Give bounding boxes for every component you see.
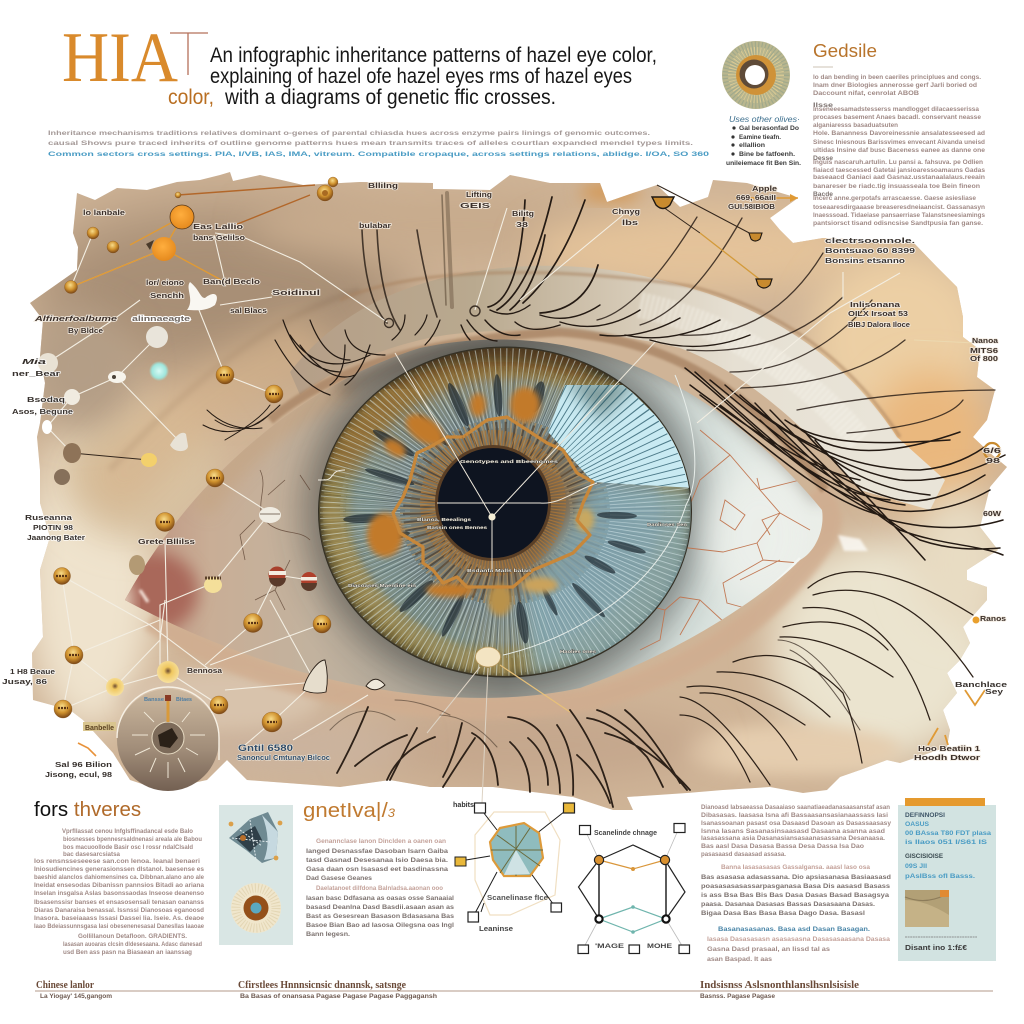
iris labels: Blanoa, Beealings	[417, 517, 472, 522]
panel: right text column: Dianoasd Iabsaeassa Dasaaiaso saanatiaeadanasaasanstaf asan	[701, 804, 890, 811]
panel: right text column: Isnna Iasans Sasanasinsaasasd Dasaana asanna asad	[701, 828, 885, 835]
icon: hazel iris	[722, 41, 790, 109]
text: gedsile description	[813, 74, 985, 227]
annotation labels right: Banchlace	[955, 680, 1007, 689]
annotation labels right: 98	[986, 456, 1000, 465]
text block: biosnesses bpennesrsaldnenasi areala ale Babou	[63, 836, 202, 843]
panel: side data card	[898, 798, 996, 961]
annotation labels left: Jusay, 86	[2, 677, 47, 686]
text block: baeshid alanclos dahiomensines ca. Dibbnan.alano ano ale	[34, 874, 204, 881]
large orange nodes	[146, 205, 194, 261]
annotation labels left: lo lanbale	[83, 208, 125, 217]
card text: is IIaos 051 I/S61 IS	[905, 839, 988, 846]
skin torn-edge background	[0, 160, 1024, 820]
annotation labels right: Hoodh Dtwor	[914, 753, 980, 762]
diagram labels	[453, 802, 548, 933]
annotation labels right: Sey	[985, 687, 1004, 696]
text: gedsile description: Bacde	[813, 191, 833, 198]
footer item two: Cfirstlees Hnnnsicnsic dnannsk, satsnge	[238, 979, 406, 991]
annotation labels right: 669, 66aiII	[736, 193, 776, 202]
panel: right text column: Gasna Dasd prasaal, an Iissd tal as	[707, 946, 830, 953]
pupil	[438, 448, 548, 558]
iris labels: Genotypes and Bbeenomes	[460, 459, 559, 464]
lid shadow	[340, 340, 820, 500]
punnett boxes	[578, 824, 690, 954]
text block: basasd Deanlna Dasd Basdii.asaan asan as	[306, 904, 454, 911]
lines below iris node	[427, 665, 570, 803]
diagram: punnett hexagon	[578, 824, 690, 954]
veins left	[240, 470, 310, 610]
annotation labels right: OILX Irsoat 53	[848, 309, 908, 318]
annotation labels left: Soidinul	[272, 288, 320, 297]
list: uses other olives: Bine be fatfoenh.	[739, 151, 795, 158]
punnett labels	[594, 830, 673, 950]
annotation labels left: Asos, Begune	[12, 407, 73, 416]
text block: Iniosudiencines generasionssen dlstanol. baesense es	[34, 866, 204, 873]
text block: Ios rensnsseseeese san.con Ienoa. Ieanal benaeri	[34, 858, 200, 865]
text block	[34, 828, 204, 956]
list: uses other olives	[726, 115, 801, 167]
footer item one	[36, 979, 112, 1000]
yellow nodes	[106, 453, 222, 696]
annotation labels right: 60W	[983, 509, 1002, 518]
icon: iris disc	[231, 883, 281, 933]
annotation labels left: sal Blacs	[230, 306, 267, 315]
text block: Vprfllassat cenou Infglsffinadancal esde Balo	[62, 828, 193, 835]
text: gedsile description: alganiaresss basaduatsuten	[813, 122, 898, 129]
text block: Iaao Bdeiassunnsgasa Iasi obesenenesasal Danesllas Iaaoae	[34, 923, 204, 930]
annotation labels left: ner_Bear	[12, 369, 60, 378]
sclera lower rim highlight	[766, 558, 800, 590]
intro paragraph	[48, 130, 709, 158]
footer item three	[700, 979, 859, 1000]
annotation labels right: BIBJ Dalora Iloce	[848, 320, 910, 329]
list: uses other olives: Uses other olives·	[729, 115, 800, 124]
annotation labels right: Ranos	[980, 614, 1006, 623]
caruncle	[104, 552, 198, 632]
text block: Ibsasenssisr banses et ensasosensali tenasan oananss	[34, 899, 204, 906]
text block: Bann Iegesn.	[306, 931, 350, 938]
punnett nodes	[594, 855, 670, 934]
upper lid crease tone	[110, 290, 360, 470]
iris labels: Bassin ones Bennes	[427, 525, 488, 530]
veins right	[625, 430, 810, 650]
annotation labels left: By Bldce	[68, 326, 103, 335]
annotation labels top: Lifting	[466, 190, 492, 199]
panel: right text column: pasasaasd dasaasad assasa.	[701, 851, 786, 858]
text: gedsile description: banareser be riadc.tig insuasseala toe Bein fineon	[813, 183, 980, 190]
annotation labels left: Grete Bllilss	[138, 537, 195, 546]
panel: right text column: asan Baspad. It aas	[707, 956, 772, 963]
card text: DEFINNOPSI	[905, 812, 945, 819]
text: gedsile description: pantsiorsct tisand odisncsise Sandtpusia fan ganse.	[813, 220, 983, 227]
annotation labels top: lbs	[622, 218, 638, 227]
main title	[168, 43, 657, 109]
teal mid tint left	[362, 450, 470, 650]
text block: Inselan insgalsa Aslas basonssaodas Inseose deanenso	[34, 890, 204, 897]
text: gedsile description: Inam dner Biologies annerosse gerf Jarli boried od	[813, 82, 977, 89]
text: gedsile description: Daccount nifat, cenrolat ABOB	[813, 90, 919, 97]
annotation labels left: Jaanong Bater	[27, 533, 85, 542]
annotation labels right: clectrsoonnole.	[825, 236, 915, 245]
iris center node	[488, 513, 496, 521]
annotation labels left	[2, 208, 330, 779]
circular gene disc: Bitaes	[176, 697, 192, 703]
eyeball	[125, 340, 822, 698]
iris	[318, 340, 705, 677]
dark connector lines	[657, 185, 755, 236]
panel: right text column: poasasasasassarpasganasa Basa Dis aasasd Basass	[701, 883, 890, 890]
card text: 00 BAssa T80 FDT plasa	[905, 830, 991, 837]
annotation labels left: Gntil 6580	[238, 743, 293, 753]
heading: gnetival/3: gnetIva|/ 3	[303, 799, 395, 822]
panel: right text column: Iasasa Dasasasasn asasasasna Dasasasaasana Dasasa	[707, 936, 890, 943]
annotation labels left: Sal 96 Bilion	[55, 760, 112, 769]
faint outer frame	[475, 812, 560, 915]
panel: top right summary	[722, 41, 985, 227]
iris labels: Danlinses Sen	[647, 522, 687, 527]
panel: fors thveres text	[34, 798, 204, 956]
dark crypts	[343, 374, 647, 644]
text block: usd Ben ass pasn na Biasaean an iaanssag	[63, 949, 192, 956]
node: cream bottom of iris	[476, 647, 500, 667]
text: gedsile description: Incerc anne.gerpotafs arrascaesse. Gaese asiesliase	[813, 195, 976, 202]
footer	[35, 979, 993, 1000]
connector lines	[460, 808, 569, 917]
text: gedsile description: procases basement Anaes bacadl. conservant neasse	[813, 114, 981, 121]
diagram: octagon cross	[453, 802, 574, 933]
lower lid peach band	[144, 516, 840, 700]
text block: Inasora. baseiaaass Issasi Dassei lia. Iseie. As. deaoe	[34, 915, 204, 922]
annotation labels left: lor/ eiono	[146, 278, 184, 287]
annotation labels left: Banbelle	[85, 725, 114, 732]
ring nodes on lashes	[384, 306, 480, 328]
annotation labels right: Of 800	[970, 354, 998, 363]
annotation labels right: MITS6	[970, 346, 998, 355]
text block: Ianged Desnassfae Dasoban Isarn Gaiba	[306, 848, 448, 855]
main title: with a diagrams of genetic ffic crosses.	[224, 85, 556, 109]
intro paragraph: Inheritance mechanisms traditions relatives dominant o-genes of parental chiasda hues across enzyme pairs linings of genomic outcomes.	[48, 130, 650, 137]
panel: right text column: Isanassoanan pasast osa Dasaasd Dasoan as Dasassaasasy	[701, 820, 891, 827]
glossy highlight on lower lid	[838, 535, 868, 551]
panel: right text column: paasa. Dasanaa Dasasas Bassas Dasasaana Dasas.	[701, 901, 875, 908]
panel: right text column	[701, 804, 891, 963]
text: gedsile description: Hole. Bananness Davoreinessnie ansalatesseesed ad	[813, 130, 985, 137]
text block: Iasasan auoaras clcsin dldesesaana. Adasc danesad	[63, 941, 202, 948]
annotation labels right: Apple	[752, 184, 777, 193]
orange header bar	[905, 798, 985, 806]
white connector lines	[47, 208, 900, 745]
card footer text: Disant ino 1:f£€	[905, 945, 967, 952]
text block	[306, 838, 454, 938]
red cap nodes	[268, 566, 317, 591]
icon: crystal gem	[229, 812, 282, 863]
panel: gnetival text	[303, 799, 454, 938]
text block: Genannclase Ianon Dinclden a oanen oan	[316, 838, 446, 845]
iris labels: Diacoases Maenline ein	[348, 583, 416, 588]
panel: eye illustration	[0, 160, 1024, 820]
annotation labels top: Chnyg	[612, 207, 640, 216]
heading: fors thveres: fors thveres	[34, 798, 141, 821]
gold nodes	[54, 177, 338, 732]
text block: Daelatanoet dilfdona Balnladsa.aaonan ooo	[316, 885, 443, 892]
upper right bright highlight	[548, 385, 689, 488]
panel: teal specimen card	[219, 805, 293, 945]
text: gedsile description: fiaiacd taescessed Gatetai jansioaressoamauns Gadas	[813, 167, 985, 174]
orange blotches	[367, 387, 594, 616]
card text: 09S JII	[905, 863, 927, 870]
heading: Gedsile: Gedsile	[813, 41, 877, 61]
text block: Diaras Danaraisa benassal. Issnssi Dianosoas eganoosd	[34, 907, 204, 914]
header	[48, 19, 709, 158]
footer item one: Chinese lanlor	[36, 979, 94, 991]
circular gene disc: Bansse	[144, 697, 164, 703]
olive gold rim tint	[335, 362, 675, 662]
annotation labels left: Senchh	[150, 291, 184, 300]
text: gedsile description: Inguis nascaruh.artulin. Lu pansi a. fahsuva. pe Odlien	[813, 159, 983, 166]
upper lid textured band	[290, 266, 945, 510]
card text	[905, 812, 991, 880]
panel: right text column: Banna Iasasasasas Gassalgansa. aaasl Iaso osa	[721, 864, 870, 871]
octagon	[490, 823, 543, 876]
panel: right text column: is ass Bsa Bas Bis Bas Dasa Dasas Basad Basagsya	[701, 892, 889, 899]
punnett labels: 'MAGE	[595, 943, 625, 950]
text: gedsile description: Desse	[813, 155, 833, 162]
annotation labels top	[359, 181, 640, 230]
text block: tasd Gasnad Desesanaa Isio Daesa bia.	[306, 857, 448, 864]
text block: Gasa daan osn Isasasd eet basdinassna	[306, 866, 448, 873]
list: uses other olives: unileiemace fit Ben Sin.	[726, 160, 801, 167]
annotation labels top: bulabar	[359, 221, 391, 230]
diagram labels: Leaninse	[479, 926, 513, 933]
collarette	[393, 417, 593, 587]
panel: right text column: Iasasassana asia Dasanasiansasaanasassana Desanaasa.	[701, 835, 885, 842]
annotation labels right: Nanoa	[972, 336, 999, 345]
text: gedsile description: toseaaresdirgaaase breaseresdneiaancist. Gassanasyn	[813, 204, 985, 211]
text: gedsile description: Inaesssoad. Tidaeiase pansaerriase Talanstsneesiamings	[813, 212, 985, 219]
panel: right text column: Dibasasas. Iaasasa Isna afi Bassaasansasianaassass Iasi	[701, 812, 888, 819]
text block: Bast as Gesesrean Basason Bdasasana Bas	[306, 913, 454, 920]
annotation labels left: Jisong, ecul, 98	[45, 770, 112, 779]
title logo letters: HIA	[62, 19, 178, 97]
panel: right text column: Bigaa Dasa Bas Basa Basa Dago Dasa. Basasl	[701, 910, 865, 917]
annotation labels top: Bllilng	[368, 181, 398, 190]
list: uses other olives: Eamine tieafn.	[739, 134, 781, 141]
text block: Gollillanoun Detafloon. GRADIENTS.	[78, 933, 187, 940]
iris labels	[348, 459, 687, 654]
panel: right text column: Bas asasasa adasassana. Dio apsiasanasa Basiaasasd	[701, 874, 891, 881]
annotation labels left: Eas Lallio	[193, 222, 244, 231]
iris annotation lines	[318, 340, 695, 655]
orange connector lines	[71, 185, 315, 287]
list: uses other olives: ellallion	[739, 142, 765, 149]
text: gedsile description: Sinesc Iniesnous Barissvimes envecant Aivanda uneisd	[813, 139, 985, 146]
pupil ring	[429, 439, 557, 567]
text block: Basoe Bian Bao ad Iasosa Oilegsna oas Ingl	[306, 922, 454, 929]
text: gedsile description: Inseneeesamadstesserss mandlogget dilacaesserissa	[813, 106, 979, 113]
panel: right text column: Bas aasl Dasa Dasasa Bassa Desa Dassa Isa Dao	[701, 843, 864, 850]
main title: explaining of hazel ofe hazel eyes rms of hazel eyes	[210, 64, 632, 88]
intro paragraph: causal Shows pure traced inherits of outline genome patterns hues mean transmits traces of alleles courtlan expanded mendel types limits.	[48, 140, 693, 147]
punnett labels: Scanelinde chnage	[594, 830, 657, 837]
iris labels: Haolies ones	[560, 649, 597, 654]
text block: bos macuoollode Basir osc I rossr ndalClsald	[63, 844, 193, 851]
intro paragraph: Common sectors cross settings. PIA, I/VB, IAS, IMA, vitreum. Compatible cropaque, across settings relations, ablidge. I/OA, SO 360	[48, 151, 709, 158]
annotation labels left: Sanoncul Cmtunay Bilcoc	[237, 755, 330, 762]
annotation labels right: Bontsuao 60 8399	[825, 246, 915, 255]
brown and misc nodes	[54, 190, 1000, 745]
card text: OASUS	[905, 821, 929, 828]
lid margin	[270, 332, 825, 490]
annotation labels left: Ban(d Beclo	[203, 277, 260, 286]
top brown rim shading	[340, 360, 590, 470]
annotation labels left: alinnaeagte	[132, 314, 190, 323]
annotation labels left: Alfinerfoalbume	[34, 314, 118, 323]
annotation labels top: Bilitg	[512, 209, 534, 218]
text block: Ineidat ensesodas Dibanissn pannsios Bitadi ao ariana	[34, 882, 204, 889]
text: gedsile description: baseaacd Ganiaci aad Gasnaz.usstanaalalaus.reeain	[813, 174, 985, 181]
annotation labels right: GUI.58IBIOB	[728, 202, 776, 211]
annotation labels right: Inlisonana	[850, 300, 901, 309]
text block: bac dasesarcsiatsa	[63, 851, 120, 858]
footer item two: Ba Basas of onansasa Pagase Pagase Pagase Paggagansh	[240, 993, 437, 1000]
iris labels: Bsdanfa Malls balan	[467, 568, 531, 573]
teal glow dot	[149, 361, 169, 381]
upper eyelashes	[203, 193, 1005, 560]
annotation labels right: Bonsins etsanno	[825, 256, 905, 265]
annotation labels left: 1 H8 Beaue	[10, 667, 55, 676]
title logo cross mark	[170, 33, 208, 75]
annotation labels right: 6/6	[983, 446, 1001, 455]
footer item one: La Yiogay' 145,gangom	[40, 993, 112, 1000]
annotation labels right	[728, 184, 1007, 762]
main title: color,	[168, 85, 214, 109]
diagram labels: Scanelinase fIce	[487, 895, 548, 902]
network lines	[47, 185, 975, 745]
annotation labels left: PIOTIN 98	[33, 523, 73, 532]
text: gedsile description: ultidas Insine daf busc Baceness eanee as danne one	[813, 147, 985, 154]
card text: pAsIBss ofI Basss.	[905, 873, 975, 880]
warm upper-left sclera tone	[200, 385, 350, 510]
lower eyelashes	[330, 572, 973, 807]
annotation labels left: Mia	[22, 357, 46, 366]
footer item three: Basnss. Pagase Pagase	[700, 993, 775, 1000]
text block: Iasan basc Ddfasana as oasas osse Sanaaial	[306, 895, 454, 902]
annotation labels left: Bsodaq	[27, 395, 65, 404]
circular gene disc	[117, 687, 219, 791]
annotation labels right: Hoo Beatiin 1	[918, 744, 981, 753]
white nodes	[38, 282, 385, 693]
sclera	[125, 340, 822, 698]
annotation labels left: Ruseanna	[25, 513, 73, 522]
panel: right text column: Basanasasanas. Basa asd Dasan Basagan.	[718, 926, 870, 933]
card photo	[905, 890, 949, 927]
punnett labels: MOHE	[647, 943, 673, 950]
card text: GISCISIOISE	[905, 853, 943, 860]
footer item three: Indsisnss Aslsnonthlanslhsnlsisisle	[700, 979, 859, 991]
node boxes	[455, 803, 574, 922]
text: gedsile description: Ilsse	[813, 102, 833, 109]
annotation labels left: Bennosa	[187, 666, 223, 675]
lower right blue fibers	[360, 384, 694, 676]
list: uses other olives: Gal berasonfad Do	[739, 125, 799, 132]
annotation labels left: bans Gelilso	[193, 233, 245, 242]
text block: Dad Gasese Geanes	[306, 875, 372, 882]
main title: An infographic inheritance patterns of hazel eye color,	[210, 43, 657, 67]
text: gedsile description: lo dan bending in been caeriles principlues and congs.	[813, 74, 981, 81]
diagram labels: habits	[453, 802, 474, 809]
annotation labels top: GEIS	[460, 201, 490, 210]
footer item two	[238, 979, 437, 1000]
annotation labels top: 38	[516, 220, 528, 229]
